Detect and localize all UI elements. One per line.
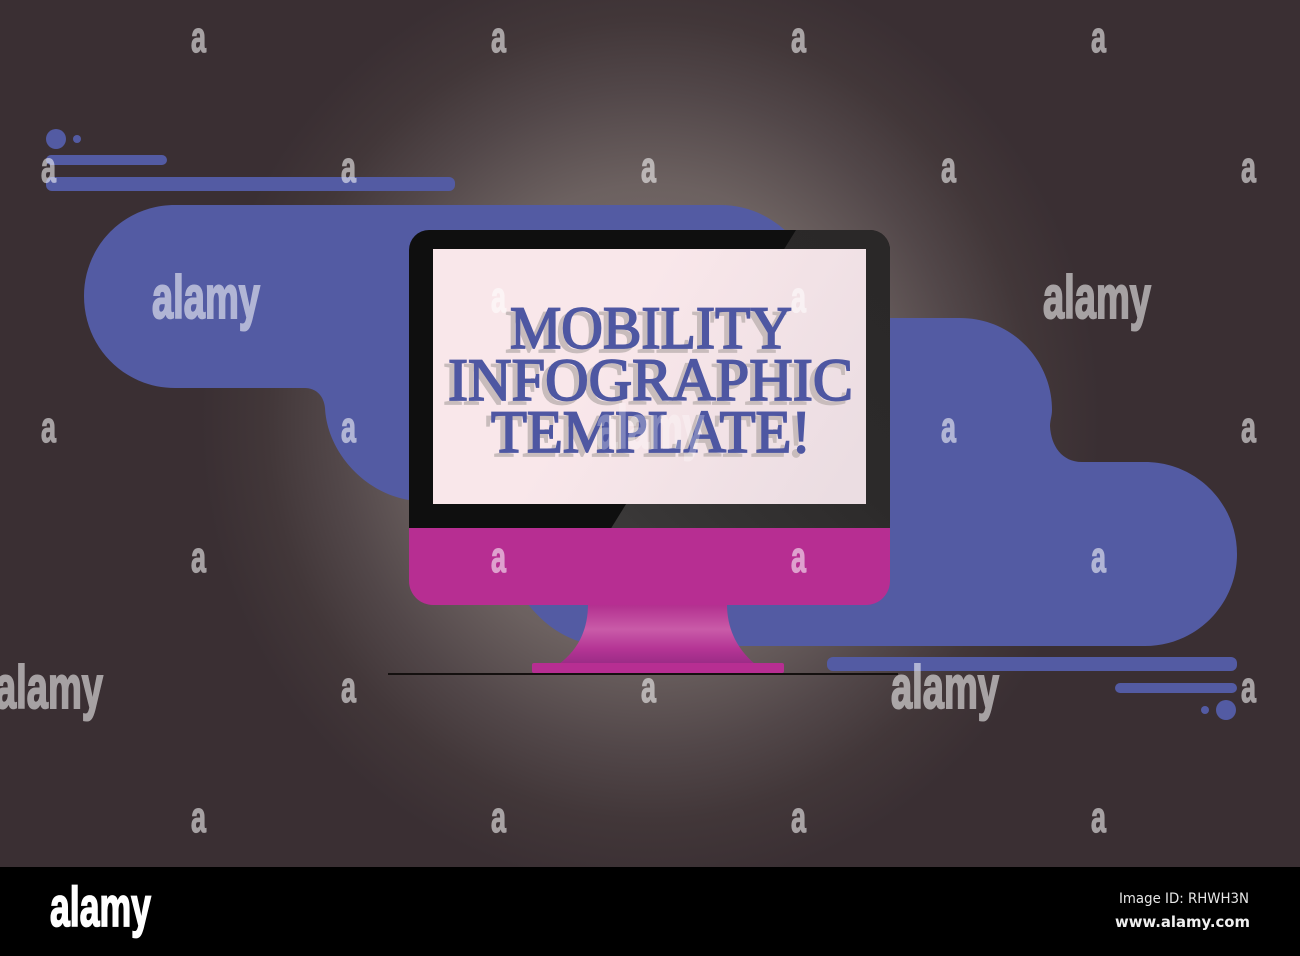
watermark row 6: a xyxy=(1241,663,1256,712)
watermark row 3: a xyxy=(491,273,506,322)
footer logo: alamy xyxy=(50,875,151,938)
watermark row 3 xyxy=(152,264,1151,331)
watermark row 2: a xyxy=(641,143,656,192)
monitor stand xyxy=(532,604,784,673)
watermark row 1: a xyxy=(1091,13,1106,62)
watermark row 1 xyxy=(191,13,1106,62)
watermark row 5: a xyxy=(1091,533,1106,582)
watermark row 1: a xyxy=(491,13,506,62)
watermark row 6: alamy xyxy=(891,654,999,721)
watermark row 7: a xyxy=(1091,793,1106,842)
title text xyxy=(448,295,853,465)
title shadow: TEMPLATE! xyxy=(486,403,806,469)
title text: INFOGRAPHIC xyxy=(448,347,853,413)
watermark row 5: a xyxy=(491,533,506,582)
title xyxy=(443,295,853,469)
watermark row 5 xyxy=(191,533,1106,582)
monitor bezel xyxy=(409,230,890,530)
watermark row 1: a xyxy=(791,13,806,62)
title text: TEMPLATE! xyxy=(491,399,811,465)
watermark row 7 xyxy=(191,793,1106,842)
watermark row 7: a xyxy=(191,793,206,842)
decorative pills and dots, bottom right xyxy=(827,657,1237,720)
watermark row 2: a xyxy=(1241,143,1256,192)
title shadow: INFOGRAPHIC xyxy=(443,351,848,417)
watermark row 1: a xyxy=(191,13,206,62)
watermark row 2: a xyxy=(341,143,356,192)
watermark row 7: a xyxy=(791,793,806,842)
ground line xyxy=(388,673,898,675)
watermark row 2: a xyxy=(941,143,956,192)
blue cloud shape xyxy=(84,205,1237,646)
website: www.alamy.com xyxy=(1115,913,1250,931)
watermark row 7: a xyxy=(491,793,506,842)
decorative pills and dots, top left xyxy=(46,129,455,191)
watermark row 6: a xyxy=(641,663,656,712)
watermark row 4: a xyxy=(941,403,956,452)
watermark row 3: alamy xyxy=(1043,264,1151,331)
monitor base panel xyxy=(409,528,890,605)
watermark row 3: a xyxy=(791,273,806,322)
screen xyxy=(433,249,866,504)
watermark row 5: a xyxy=(791,533,806,582)
watermark row 3: alamy xyxy=(152,264,260,331)
watermark row 6 xyxy=(0,654,1256,721)
watermark row 4: a xyxy=(41,403,56,452)
image id: Image ID: RHWH3N xyxy=(1119,891,1249,907)
title shadow xyxy=(443,299,848,469)
watermark row 4: a xyxy=(1241,403,1256,452)
watermark row 4: alamy xyxy=(596,394,704,461)
watermark row 6: alamy xyxy=(0,654,103,721)
title text: MOBILITY xyxy=(510,295,792,361)
watermark row 5: a xyxy=(191,533,206,582)
watermark row 2 xyxy=(41,143,1256,192)
footer bar xyxy=(0,867,1300,956)
watermark row 6: a xyxy=(341,663,356,712)
watermark row 2: a xyxy=(41,143,56,192)
title shadow: MOBILITY xyxy=(505,299,787,365)
watermark row 4: a xyxy=(341,403,356,452)
watermark row 4 xyxy=(41,394,1256,461)
desktop monitor xyxy=(409,230,890,673)
